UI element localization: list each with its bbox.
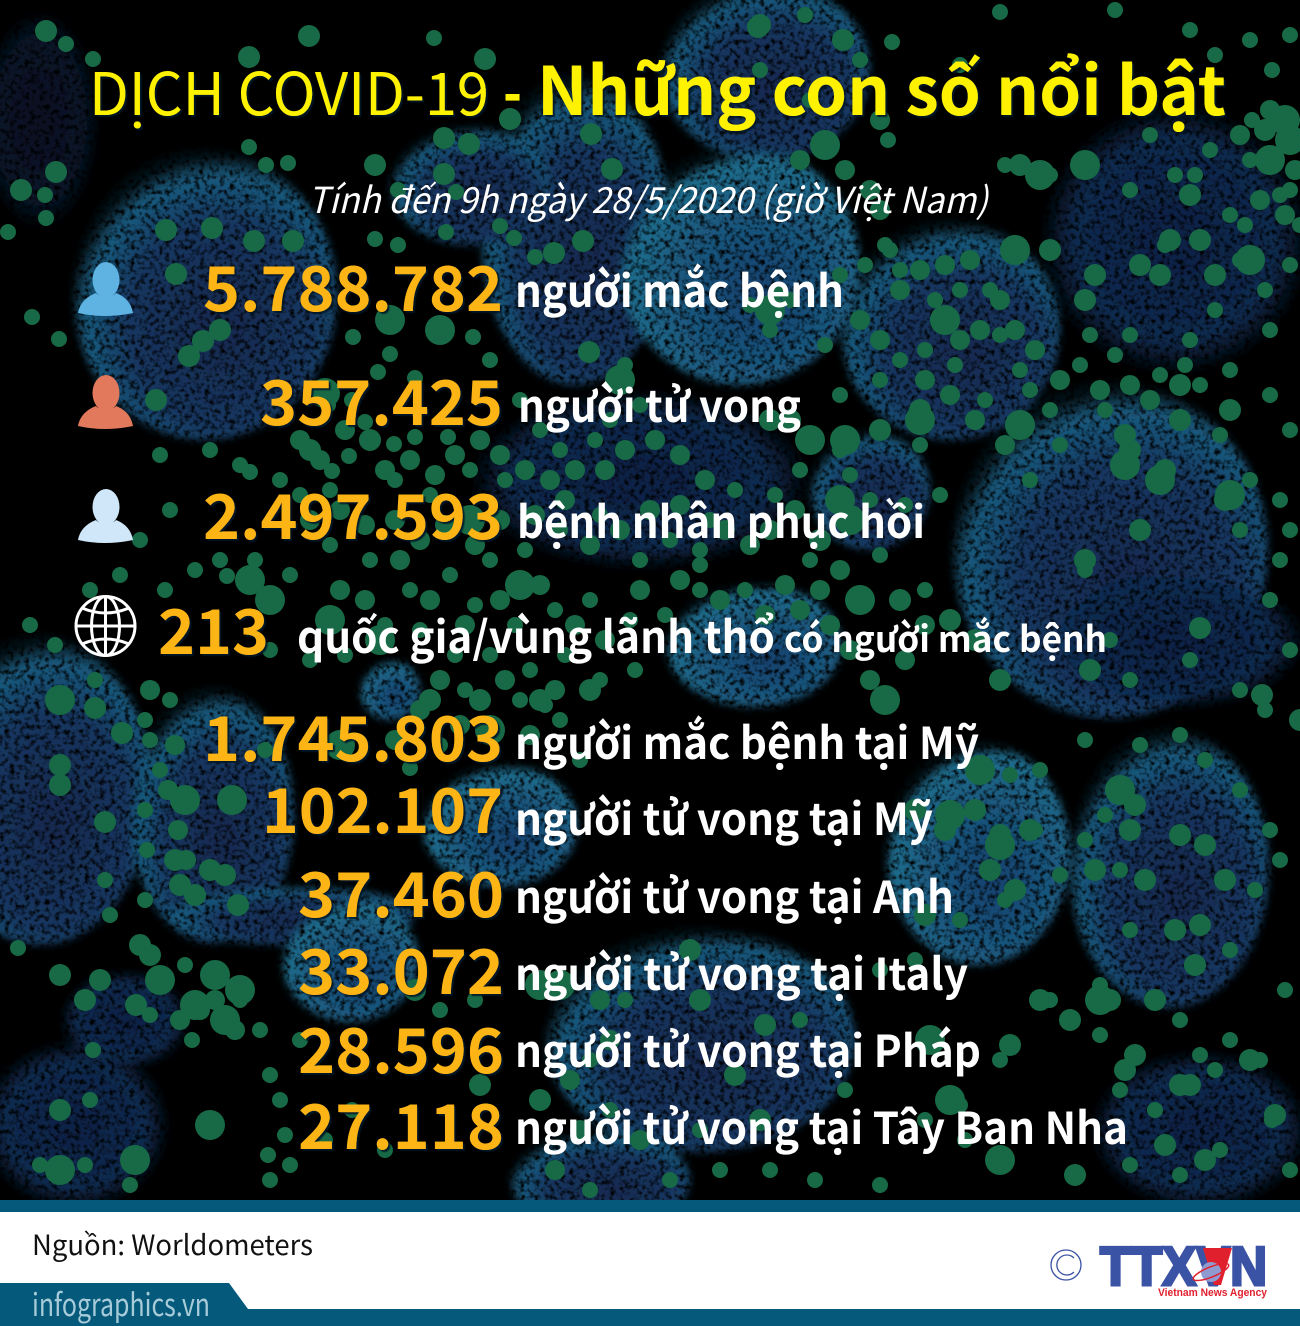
stat: US deaths	[262, 761, 933, 851]
footer panel	[0, 1200, 1300, 1326]
stat: cases: 5.788.782	[203, 239, 503, 329]
stat: France deaths: người tử vong tại Pháp	[515, 1016, 981, 1080]
stat: Spain deaths: 27.118	[298, 1077, 504, 1167]
icon: copyright	[1051, 1250, 1081, 1280]
extra clusters: centre band, right arc, lower-left arm	[150, 110, 1295, 1170]
stat: Spain deaths: người tử vong tại Tây Ban Nha	[515, 1093, 1128, 1157]
stat: Italy deaths	[298, 922, 968, 1012]
stat: countries: có người mắc bệnh	[784, 611, 1107, 663]
icon: person red	[78, 375, 133, 429]
stat: France deaths: 28.596	[298, 1001, 504, 1091]
subtitle date: Tính đến 9h ngày 28/5/2020 (giờ Việt Nam)	[308, 172, 990, 224]
stat: Spain deaths	[298, 1077, 1128, 1167]
stat: countries	[158, 582, 1107, 672]
title: Những con số nổi bật	[537, 38, 1226, 135]
source text: Nguồn: Worldometers	[32, 1224, 313, 1264]
stat: US cases	[203, 689, 979, 779]
stat: recovered	[203, 467, 925, 557]
stat: deaths: người tử vong	[518, 371, 801, 435]
stat: UK deaths: người tử vong tại Anh	[515, 862, 954, 926]
stat: US cases: người mắc bệnh tại Mỹ	[515, 708, 979, 772]
website label: infographics.vn	[32, 1280, 210, 1325]
logo: TTXVN: Vietnam News Agency	[1158, 1287, 1268, 1299]
stat: UK deaths: 37.460	[298, 845, 504, 935]
stat: France deaths	[298, 1001, 981, 1091]
icon: person pale	[78, 489, 133, 543]
stat: recovered: 2.497.593	[203, 467, 503, 557]
stat: deaths: 357.425	[260, 353, 503, 443]
logo: TTXVN: TTXVN	[1100, 1235, 1267, 1297]
stat: cases	[203, 239, 844, 329]
stat: Italy deaths: 33.072	[298, 922, 504, 1012]
stat: recovered: bệnh nhân phục hồi	[517, 487, 925, 551]
icon: person blue	[78, 262, 133, 316]
stat: US cases: 1.745.803	[203, 689, 503, 779]
stat: US deaths: người tử vong tại Mỹ	[515, 784, 933, 848]
stat: countries: quốc gia/vùng lãnh thổ	[297, 602, 775, 666]
title	[89, 38, 1226, 135]
stat: UK deaths	[298, 845, 954, 935]
stat: deaths	[260, 353, 801, 443]
icon: globe	[76, 596, 135, 656]
stat: Italy deaths: người tử vong tại Italy	[515, 939, 968, 1003]
title: -	[503, 43, 522, 133]
title: DỊCH COVID-19	[89, 47, 489, 132]
stat: US deaths: 102.107	[262, 761, 503, 851]
stat: cases: người mắc bệnh	[515, 256, 844, 320]
stat: countries: 213	[158, 582, 269, 672]
